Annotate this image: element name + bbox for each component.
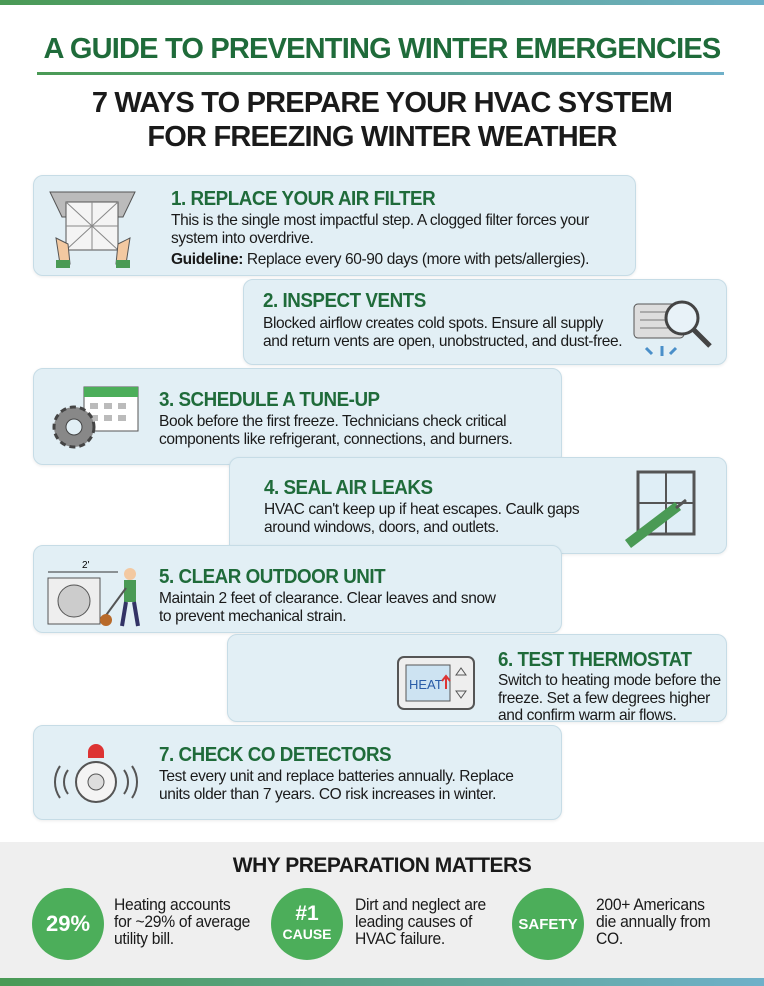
stat 2: CAUSE bbox=[282, 926, 332, 942]
top bar bbox=[0, 0, 764, 5]
card 4: 4. SEAL AIR LEAKS bbox=[264, 477, 433, 499]
card 1 bbox=[33, 175, 636, 276]
card 1: system into overdrive. bbox=[171, 230, 313, 246]
stat 3 bbox=[512, 888, 710, 960]
stat 2: Dirt and neglect are bbox=[355, 895, 486, 914]
card 6: freeze. Set a few degrees higher bbox=[498, 690, 710, 706]
stat 1: for ~29% of average bbox=[114, 912, 250, 931]
panel: why preparation matters bbox=[0, 842, 764, 978]
stat 1 bbox=[32, 888, 250, 960]
card 3: 3. SCHEDULE A TUNE-UP bbox=[159, 389, 380, 411]
stat 2: HVAC failure. bbox=[355, 929, 445, 948]
card 2: and return vents are open, unobstructed, and dust-free. bbox=[263, 332, 622, 350]
card 1: This is the single most impactful step. A clogged filter forces your bbox=[171, 212, 589, 229]
stat 2: leading causes of bbox=[355, 912, 472, 931]
card 6: 6. TEST THERMOSTAT bbox=[498, 649, 691, 671]
icon: outdoor unit with person: 2' bbox=[82, 560, 90, 571]
stat 2 bbox=[271, 888, 486, 960]
icon: outdoor unit with person bbox=[48, 560, 140, 626]
card 3: components like refrigerant, connections, and burners. bbox=[159, 430, 512, 448]
card 7: 7. CHECK CO DETECTORS bbox=[159, 744, 391, 766]
card 2: Blocked airflow creates cold spots. Ensure all supply bbox=[263, 315, 603, 332]
stat 3: CO. bbox=[596, 929, 623, 948]
card 1: Guideline: Replace every 60-90 days (more with pets/allergies). bbox=[171, 251, 589, 268]
title: A GUIDE TO PREVENTING WINTER EMERGENCIES bbox=[44, 33, 720, 65]
subtitle: 7 WAYS TO PREPARE YOUR HVAC SYSTEM bbox=[92, 87, 672, 119]
card 4 bbox=[229, 457, 727, 554]
icon: window and caulk gun bbox=[625, 470, 696, 548]
card 2 bbox=[243, 279, 727, 365]
card 6 bbox=[227, 634, 727, 722]
icon: air filter bbox=[49, 192, 136, 268]
bottom bar bbox=[0, 978, 764, 986]
card 7: units older than 7 years. CO risk increases in winter. bbox=[159, 786, 496, 802]
card 2: 2. INSPECT VENTS bbox=[263, 290, 426, 312]
card 5: 5. CLEAR OUTDOOR UNIT bbox=[159, 566, 385, 588]
icon: thermostat bbox=[397, 656, 475, 710]
stat 3: 200+ Americans bbox=[596, 895, 705, 914]
subtitle bbox=[92, 87, 672, 153]
card 5: Maintain 2 feet of clearance. Clear leaves and snow bbox=[159, 590, 496, 607]
stat 1: 29% bbox=[46, 911, 90, 936]
card 6: and confirm warm air flows. bbox=[498, 707, 676, 724]
icon: vent magnifier bbox=[634, 300, 712, 356]
icon: CO detector bbox=[54, 744, 138, 803]
stat 2: #1 bbox=[295, 902, 319, 925]
card 7: Test every unit and replace batteries annually. Replace bbox=[159, 768, 514, 785]
stat 1: Heating accounts bbox=[114, 895, 230, 914]
stat 3: die annually from bbox=[596, 912, 710, 931]
card 4: HVAC can't keep up if heat escapes. Caulk gaps bbox=[264, 501, 579, 518]
card 6: Switch to heating mode before the bbox=[498, 672, 721, 689]
card 5: to prevent mechanical strain. bbox=[159, 608, 346, 624]
icon: gear and calendar bbox=[52, 386, 138, 448]
stat 1: utility bill. bbox=[114, 929, 174, 948]
subtitle: FOR FREEZING WINTER WEATHER bbox=[147, 121, 617, 153]
card 1: 1. REPLACE YOUR AIR FILTER bbox=[171, 188, 435, 210]
card 3: Book before the first freeze. Technicians check critical bbox=[159, 413, 506, 430]
card 4: around windows, doors, and outlets. bbox=[264, 518, 499, 536]
card 3 bbox=[33, 368, 562, 465]
heading: WHY PREPARATION MATTERS bbox=[233, 854, 531, 877]
icon: thermostat: HEAT bbox=[409, 677, 443, 692]
stat 3: SAFETY bbox=[518, 916, 578, 932]
card 7 bbox=[33, 725, 562, 820]
card 5 bbox=[33, 545, 562, 633]
